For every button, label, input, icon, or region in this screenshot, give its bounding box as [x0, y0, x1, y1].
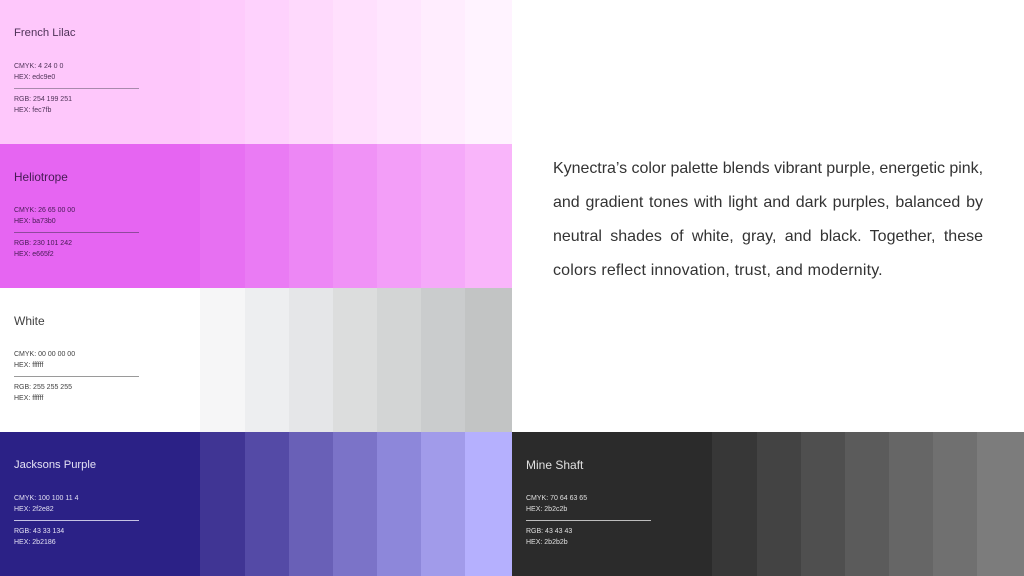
swatch name: French Lilac	[14, 27, 76, 39]
text block: palette description: Kynectra’s color palette blends vibrant purple, energetic pink,	[553, 160, 983, 177]
text block: palette description: colors reflect innovation, trust, and modernity.	[553, 262, 883, 279]
CMYK values: CMYK: 70 64 63 65	[526, 495, 587, 502]
text block: palette description	[553, 160, 983, 279]
HEX value: HEX: ffffff	[14, 362, 43, 369]
panel: Jacksons Purple	[0, 432, 512, 576]
RGB values: RGB: 254 199 251	[14, 96, 72, 103]
swatch name: White	[14, 314, 45, 328]
text block: palette description: and gradient tones with light and dark purples, balanced by	[553, 194, 983, 211]
panel: White	[0, 288, 512, 432]
HEX value: HEX: fec7fb	[14, 107, 51, 114]
HEX value: HEX: edc9e0	[14, 74, 55, 81]
HEX value: HEX: 2b2186	[14, 539, 56, 546]
HEX value: HEX: ba73b0	[14, 218, 56, 225]
HEX value: HEX: 2b2c2b	[526, 506, 567, 513]
RGB values: RGB: 255 255 255	[14, 384, 72, 391]
CMYK values: CMYK: 100 100 11 4	[14, 495, 78, 502]
swatch name: Jacksons Purple	[14, 459, 96, 471]
panel: French Lilac	[0, 0, 512, 144]
HEX value: HEX: e665f2	[14, 251, 54, 258]
swatch name: Mine Shaft	[526, 458, 583, 472]
HEX value: HEX: 2f2e82	[14, 506, 54, 513]
panel: Heliotrope	[0, 144, 512, 288]
HEX value: HEX: 2b2b2b	[526, 539, 568, 546]
swatch name: Heliotrope	[14, 170, 68, 184]
CMYK values: CMYK: 00 00 00 00	[14, 351, 75, 358]
RGB values: RGB: 230 101 242	[14, 240, 72, 247]
panel: Mine Shaft	[512, 432, 1024, 576]
text block: palette description: neutral shades of white, gray, and black. Together, these	[553, 228, 983, 245]
CMYK values: CMYK: 26 65 00 00	[14, 207, 75, 214]
RGB values: RGB: 43 33 134	[14, 528, 64, 535]
RGB values: RGB: 43 43 43	[526, 528, 572, 535]
HEX value: HEX: ffffff	[14, 395, 43, 402]
CMYK values: CMYK: 4 24 0 0	[14, 63, 63, 70]
